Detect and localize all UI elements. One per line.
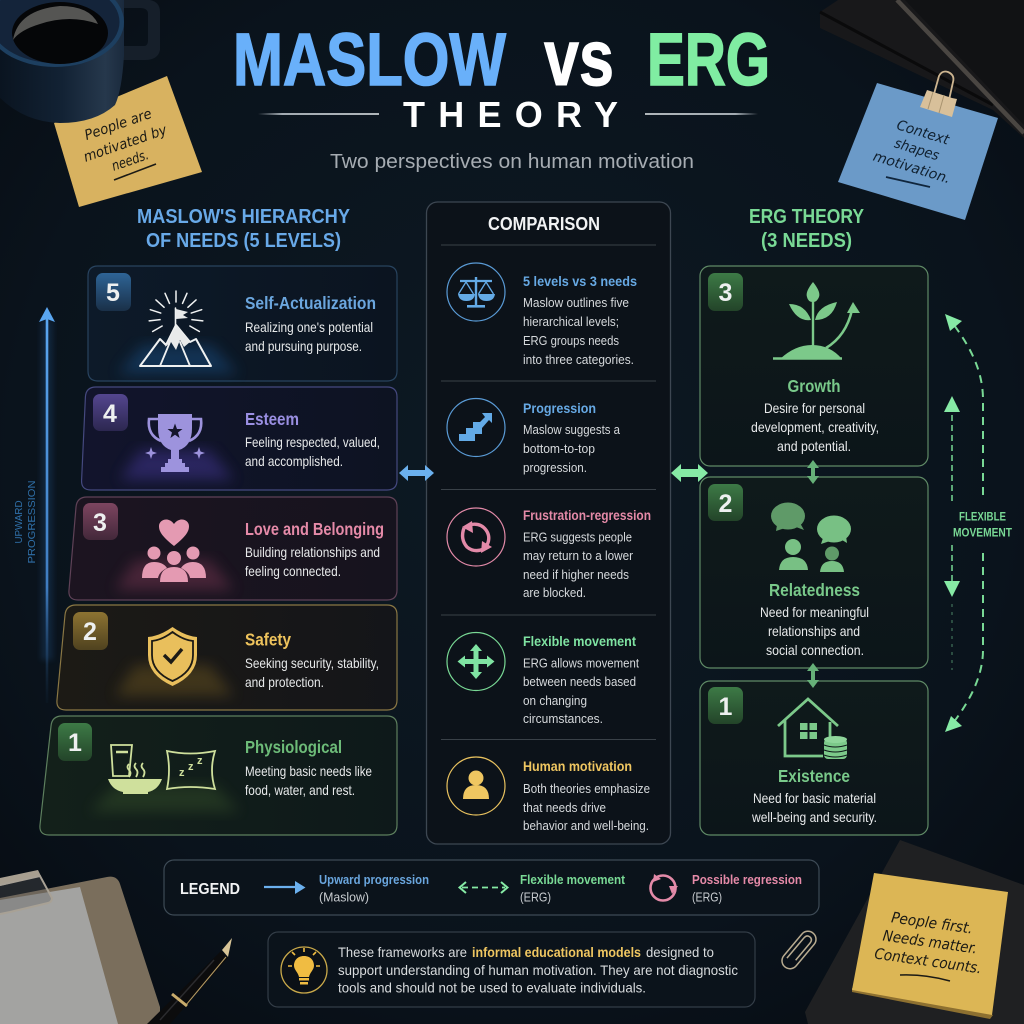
panel: love and belonging: 3 — [93, 509, 107, 537]
panel: growth: Desire for personal — [764, 401, 865, 416]
sticky note: people first — [852, 873, 1008, 1019]
title — [233, 13, 770, 135]
icon: food, water and pillow: z — [179, 767, 185, 779]
panel: esteem: Feeling respected, valued, — [245, 435, 380, 450]
comparison item: progression: Progression — [523, 400, 596, 416]
panel: love and belonging — [69, 497, 397, 600]
subtitle: Two perspectives on human motivation — [330, 150, 694, 173]
icon: food, water and pillow — [108, 745, 215, 794]
comparison item: flexible movement: ERG allows movement — [523, 656, 639, 670]
panel: safety: Safety — [245, 630, 291, 650]
comparison item: 5 levels vs 3 needs: ERG groups needs — [523, 333, 619, 348]
sticky note: people are motivated by needs — [54, 76, 202, 207]
sticky note: people first: Context counts. — [873, 945, 983, 977]
comparison item: frustration-regression: are blocked. — [523, 585, 586, 600]
disclaimer: These frameworks are — [338, 944, 467, 960]
legend item: possible regression: Possible regression — [692, 872, 802, 887]
panel: physiological — [40, 716, 397, 835]
decoration: pen — [147, 938, 232, 1024]
panel: love and belonging: Love and Belonging — [245, 519, 384, 539]
legend item: flexible movement: Flexible movement — [520, 872, 626, 887]
comparison item: 5 levels vs 3 needs — [447, 263, 637, 367]
sticky note: people are motivated by needs: motivated by — [82, 122, 170, 166]
panel: safety: and protection. — [245, 675, 324, 690]
panel: existence — [700, 681, 928, 835]
icon: plant with arrow — [773, 282, 860, 359]
legend item: possible regression — [650, 872, 802, 904]
label: flexible movement: MOVEMENT — [953, 528, 1012, 540]
heading: Maslow's hierarchy — [137, 206, 351, 252]
comparison item: human motivation: behavior and well-being. — [523, 818, 649, 833]
disclaimer: tools and should not be used to evaluate individuals. — [338, 980, 646, 996]
panel: physiological: 1 — [68, 729, 82, 757]
panel: esteem: and accomplished. — [245, 454, 343, 469]
panel: safety: 2 — [83, 618, 97, 646]
comparison item: frustration-regression: ERG suggests people — [523, 530, 632, 544]
heading: ERG theory — [749, 206, 865, 252]
arrow: Maslow to comparison — [399, 465, 434, 481]
panel: love and belonging: Building relationships and — [245, 545, 380, 560]
panel: relatedness — [700, 477, 928, 668]
legend item: flexible movement: (ERG) — [520, 890, 551, 904]
heading: Maslow's hierarchy: OF NEEDS (5 LEVELS) — [146, 230, 341, 252]
icon: trophy — [145, 414, 205, 472]
upward progression arrow — [39, 307, 55, 703]
panel: comparison — [426, 202, 670, 844]
panel: relatedness: social connection. — [766, 643, 864, 658]
panel: safety — [57, 605, 397, 710]
label: flexible movement — [953, 512, 1012, 540]
decoration: clipboard — [0, 870, 160, 1024]
panel: growth — [700, 266, 928, 466]
title: vs — [544, 13, 614, 102]
comparison item: frustration-regression: Frustration-regression — [523, 507, 651, 523]
panel: growth: 3 — [719, 279, 732, 307]
sticky note: context shapes motivation: motivation. — [871, 149, 952, 187]
heading: comparison: COMPARISON — [488, 214, 600, 234]
comparison item: frustration-regression — [447, 507, 651, 600]
panel: existence: 1 — [719, 693, 733, 721]
comparison item: flexible movement: on changing — [523, 693, 587, 708]
comparison item: 5 levels vs 3 needs: 5 levels vs 3 needs — [523, 273, 637, 289]
disclaimer: informal educational models — [472, 944, 641, 960]
comparison item: flexible movement: Flexible movement — [523, 633, 636, 649]
heading: ERG theory: ERG THEORY — [749, 206, 865, 228]
sticky note: people first: Needs matter. — [882, 926, 978, 958]
decoration: stacked notebooks top right — [820, 0, 1024, 138]
panel: self-actualization: Self-Actualization — [245, 293, 376, 313]
legend: LEGEND — [180, 881, 240, 898]
panel: existence: Need for basic material — [753, 791, 876, 806]
comparison item: human motivation: Human motivation — [523, 758, 632, 774]
panel: esteem: Esteem — [245, 409, 299, 429]
icon: house with coins — [778, 699, 847, 759]
comparison item: human motivation — [447, 757, 650, 833]
panel: self-actualization — [88, 266, 397, 381]
comparison item: 5 levels vs 3 needs: into three categories. — [523, 352, 634, 367]
legend item: upward progression: (Maslow) — [319, 890, 369, 904]
panel: esteem: 4 — [103, 400, 117, 428]
panel: growth: development, creativity, — [751, 420, 879, 435]
sticky note: context shapes motivation — [838, 83, 998, 220]
decoration: notebook bottom right — [805, 840, 1024, 1024]
panel: growth: Growth — [788, 376, 840, 396]
title: MASLOW — [233, 18, 506, 101]
disclaimer: designed to — [646, 944, 714, 960]
legend item: flexible movement — [460, 872, 626, 904]
panel: physiological: Meeting basic needs like — [245, 764, 372, 779]
panel: relatedness: 2 — [719, 490, 732, 518]
legend item: upward progression — [264, 872, 429, 904]
disclaimer: support understanding of human motivation. They are not diagnostic — [338, 962, 738, 978]
label: upward progression — [14, 480, 38, 564]
comparison item: flexible movement: circumstances. — [523, 711, 603, 726]
comparison item: human motivation: that needs drive — [523, 800, 606, 815]
disclaimer — [268, 932, 755, 1007]
comparison item: human motivation: Both theories emphasize — [523, 781, 650, 796]
panel: safety: Seeking security, stability, — [245, 656, 379, 671]
heading: Maslow's hierarchy: MASLOW'S HIERARCHY — [137, 206, 351, 228]
icon: people with speech bubbles — [771, 502, 851, 572]
sticky note: people first: People first. — [890, 908, 974, 938]
title: THEORY — [403, 94, 618, 135]
decoration: coffee mug — [0, 0, 160, 123]
comparison item: 5 levels vs 3 needs: Maslow outlines five — [523, 295, 629, 310]
sticky note: context shapes motivation: Context — [895, 117, 951, 149]
legend item: possible regression: (ERG) — [692, 890, 722, 904]
sticky note: people are motivated by needs: needs. — [110, 147, 151, 175]
panel: self-actualization: Realizing one's potential — [245, 320, 373, 335]
icon: food, water and pillow: z — [188, 761, 194, 773]
label: upward progression: PROGRESSION — [27, 480, 38, 564]
legend item: upward progression: Upward progression — [319, 872, 429, 887]
panel: self-actualization: 5 — [106, 279, 120, 307]
panel: love and belonging: feeling connected. — [245, 564, 341, 579]
arrow: growth to relatedness — [807, 460, 819, 484]
comparison item: flexible movement: between needs based — [523, 674, 636, 689]
panel: existence: well-being and security. — [751, 810, 877, 825]
arrows: flexible movement — [944, 314, 983, 732]
title: ERG — [647, 18, 770, 101]
comparison item: 5 levels vs 3 needs: hierarchical levels; — [523, 314, 619, 329]
comparison item: progression: progression. — [523, 460, 587, 475]
panel: physiological: Physiological — [245, 737, 342, 757]
comparison item: flexible movement — [447, 632, 639, 726]
panel: esteem — [82, 387, 397, 490]
label: upward progression: UPWARD — [14, 500, 25, 544]
comparison item: progression: bottom-to-top — [523, 441, 595, 456]
panel: relatedness: Need for meaningful — [760, 605, 869, 620]
icon: shield — [148, 627, 197, 686]
comparison item: frustration-regression: may return to a lower — [523, 548, 634, 563]
sticky note: people are motivated by needs: People are — [83, 106, 154, 144]
panel: self-actualization: and pursuing purpose. — [245, 339, 362, 354]
arrow: relatedness to existence — [807, 663, 819, 688]
panel: relatedness: Relatedness — [769, 580, 860, 600]
label: flexible movement: FLEXIBLE — [959, 512, 1006, 524]
icon: binder clip — [920, 72, 957, 117]
icon: light bulb — [281, 947, 327, 993]
comparison item: progression — [447, 398, 621, 475]
comparison item: progression: Maslow suggests a — [523, 422, 621, 437]
panel: relatedness: relationships and — [768, 624, 860, 639]
comparison item: frustration-regression: need if higher needs — [523, 567, 629, 582]
panel: existence: Existence — [778, 766, 850, 786]
icon: food, water and pillow: z — [197, 755, 203, 767]
icon: mountain with flag — [140, 291, 211, 366]
sticky note: context shapes motivation: shapes — [892, 136, 941, 164]
decoration: paperclip — [779, 928, 819, 972]
icon: heart and people — [142, 520, 206, 582]
panel: physiological: food, water, and rest. — [245, 783, 355, 798]
legend — [164, 860, 819, 915]
arrow: comparison to ERG — [671, 464, 708, 482]
heading: ERG theory: (3 NEEDS) — [761, 230, 852, 252]
panel: growth: and potential. — [777, 439, 851, 454]
